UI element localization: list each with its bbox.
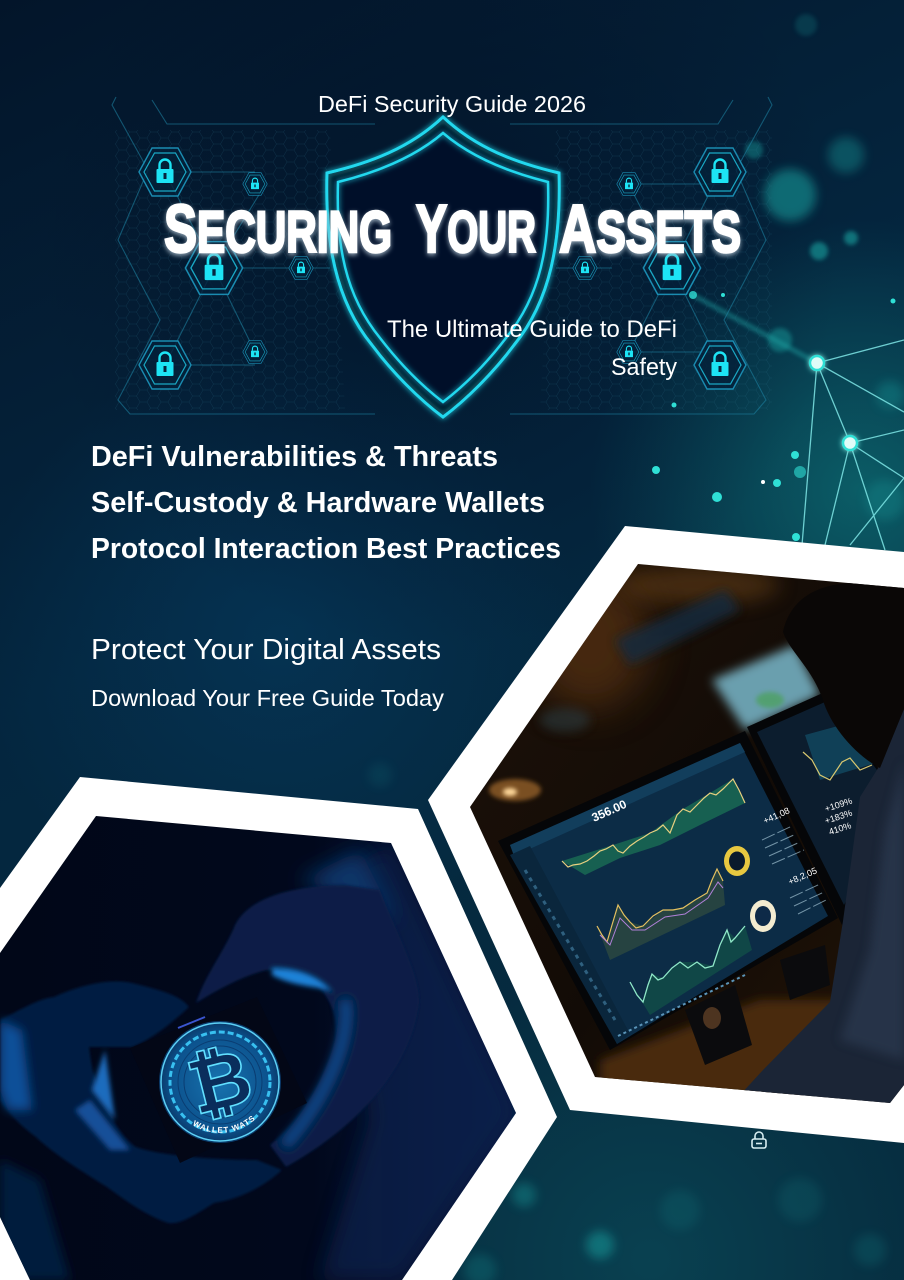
call to action: [91, 634, 445, 711]
subtitle: Safety: [611, 354, 677, 381]
second monitor: +183%: [824, 808, 854, 826]
panel: hexagon photo of trader at monitors: [428, 526, 904, 1143]
main monitor with charts: +41,08: [762, 805, 791, 826]
call to action: Download Your Free Guide Today: [91, 685, 445, 711]
title: Securing Your Assets: ASSETS: [559, 191, 741, 267]
panel: hexagon photo of hands holding bitcoin wallet: [0, 777, 557, 1280]
title: Securing Your Assets: SECURING: [164, 191, 392, 267]
main monitor with charts: +8,2,05: [787, 865, 818, 887]
topic list: Protocol Interaction Best Practices: [91, 533, 561, 565]
header artwork: circuit frames and hex grid: [112, 97, 772, 414]
icon: glowing shield: [327, 117, 559, 417]
person silhouette: shirt and head: [744, 583, 904, 1103]
monitor stand: [685, 945, 830, 1065]
subtitle: The Ultimate Guide to DeFi: [387, 316, 677, 343]
hardware wallet with bitcoin coin: [130, 1016, 307, 1163]
subtitle: [387, 316, 677, 381]
topic list: DeFi Vulnerabilities & Threats: [91, 441, 498, 473]
main monitor with charts: 356.00: [590, 797, 629, 825]
left hand: [0, 981, 282, 1223]
main monitor with charts: [498, 731, 838, 1050]
hardware wallet with bitcoin coin: ₿: [179, 1031, 261, 1132]
icon: small padlock: [752, 1132, 766, 1148]
topic list: [91, 441, 561, 565]
icon: padlock hexagons: [139, 148, 746, 389]
second monitor: 410%: [828, 820, 853, 837]
title: Securing Your Assets: YOUR: [416, 191, 536, 267]
title: Securing Your Assets: [164, 191, 741, 267]
network graph: nodes and links: [652, 291, 904, 550]
second monitor: [747, 694, 878, 924]
second monitor: +109%: [824, 796, 854, 814]
call to action: Protect Your Digital Assets: [91, 634, 441, 666]
topic list: Self-Custody & Hardware Wallets: [91, 487, 545, 519]
eyebrow: guide name and year: DeFi Security Guide 2026: [318, 91, 586, 117]
right hand: [196, 884, 387, 1168]
hardware wallet with bitcoin coin: WALLET WATS: [194, 1116, 254, 1133]
blurred teal bokeh background: [368, 14, 904, 1280]
